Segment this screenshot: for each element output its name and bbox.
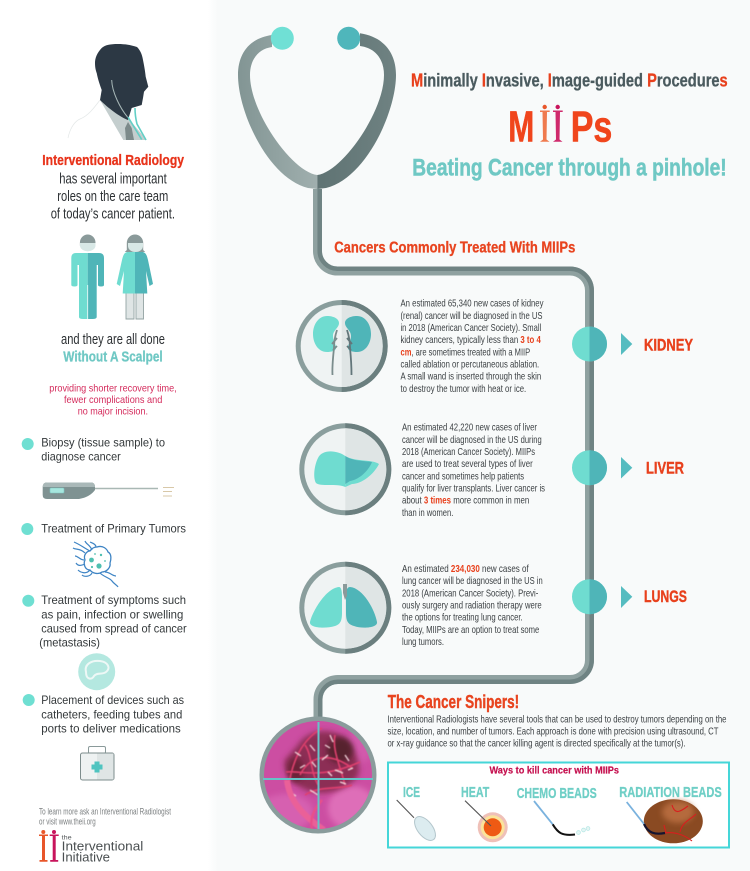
text: without a scalpel [61,331,165,366]
stethoscope tube [238,27,592,722]
label: kidney: KIDNEY [644,336,694,354]
panel: ways to kill cancer [388,762,729,848]
text: cancer snipers description [388,713,727,750]
bullet: primary tumors: Treatment of Primary Tumors [41,521,186,535]
tool: ice: ICE [403,784,420,801]
heading: full name of procedures: Minimally Invasive, Image-guided Procedures [411,71,728,91]
arrow: kidney [621,333,632,355]
text: interventional radiology intro: Interventional Radiology [42,152,185,169]
text: interventional radiology intro: of today’s cancer patient. [51,205,175,222]
bullet: symptoms: (metastasis) [39,636,100,650]
icon: stomach [78,653,115,690]
text: without a scalpel: Without A Scalpel [63,349,163,366]
logo: the interventional initiative [39,830,143,865]
text: liver description: An estimated 42,220 new cases of liver [402,422,537,434]
panel: kidney [296,298,694,395]
marker: lungs node [572,579,607,614]
text: liver description: cancer and sometimes help patients [402,470,524,482]
tool: ice [397,784,440,844]
logo: the interventional initiative: the [62,835,72,841]
text: learn more: To learn more ask an Interventional Radiologist [39,806,171,817]
text: benefits: providing shorter recovery time, [49,383,177,395]
icon: female clinician [117,234,153,319]
bullet: biopsy: Biopsy (tissue sample) to [41,436,165,450]
text: learn more [39,806,171,827]
text: lungs description: Today, MIIPs are an option to treat some [402,624,539,636]
image: tumor in crosshair scope [257,716,376,834]
bullet: symptoms [22,593,187,650]
title: MIIPs [508,103,612,152]
bullet: symptoms: caused from spread of cancer [41,622,187,636]
panel: liver [299,422,684,519]
bullet: devices: catheters, feeding tubes and [41,707,182,721]
text: kidney description [400,298,544,395]
bullet: devices: Placement of devices such as [41,693,184,707]
text: kidney description: An estimated 65,340 new cases of kidney [400,298,544,310]
text: lungs description: lung cancer will be diagnosed in the US in [402,575,543,587]
bullet: biopsy: diagnose cancer [41,450,121,464]
icon: lungs [299,562,391,654]
text: liver description: about 3 times more common in men [402,495,529,507]
panel: lungs [299,562,687,654]
label: liver: LIVER [646,458,684,478]
text: liver description [402,422,545,519]
text: liver description: than in women. [402,507,453,519]
marker: liver node [572,450,607,485]
bullet: symptoms: as pain, infection or swelling [41,607,183,621]
text: without a scalpel: and they are all done [61,331,165,348]
text: kidney description: (renal) cancer will be diagnosed in the US [400,310,542,322]
bullet: devices: ports to deliver medications [41,722,181,736]
bullet: symptoms: Treatment of symptoms such [41,593,186,607]
text: lungs description [402,563,543,648]
icon: liver [299,423,391,515]
text: interventional radiology intro [42,152,185,222]
panel heading: Ways to kill cancer with MIIPs [490,766,619,777]
marker: kidney node [572,326,607,362]
text: liver description: qualify for liver transplants. Liver cancer is [402,482,545,494]
bullet: devices [23,693,184,736]
arrow: liver [621,457,632,478]
text: liver description: cancer will be diagnosed in the US during [402,434,542,446]
title: MIIPs: M [508,103,534,152]
tool: heat [461,784,508,842]
text: interventional radiology intro: roles on the care team [57,188,168,205]
text: kidney description: kidney cancers, typically less than 3 to 4 [400,334,541,346]
tool: radiation beads [619,784,722,843]
text: benefits: fewer complications and [64,394,162,406]
icon: kidneys [296,300,388,392]
text: lungs description: 2018 (American Cancer Society). Previ- [402,587,539,599]
label: lungs: LUNGS [644,587,687,606]
text: liver description: 2018 (American Cancer Society). MIIPs [402,446,535,458]
text: kidney description: called ablation or percutaneous ablation. [400,358,539,370]
logo: the interventional initiative: Interventional [62,839,143,854]
text: kidney description: A small wand is inserted through the skin [400,371,541,383]
text: lungs description: ously surgery and radiation therapy were [402,600,542,612]
heading: the cancer snipers: The Cancer Snipers! [388,692,519,712]
text: lungs description: An estimated 234,030 new cases of [402,563,529,575]
logo: the interventional initiative: Initiative [62,850,110,865]
text: kidney description: to destroy the tumor with heat or ice. [400,383,526,395]
bullet: biopsy [22,436,165,464]
tool: chemo beads: CHEMO BEADS [517,785,597,802]
text: lungs description: lung tumors. [402,636,444,648]
arrow: lungs [621,586,632,608]
tool: chemo beads [517,785,597,835]
icon: doctor silhouette [68,44,148,140]
icon: tumor cell [73,541,118,587]
text: kidney description: cm, are sometimes treated with a MIIP [400,346,530,358]
text: interventional radiology intro: has several important [59,170,167,187]
text: lungs description: the options for treating lung cancer. [402,612,523,624]
tool: heat: HEAT [461,784,489,801]
heading: cancers commonly treated: Cancers Commonly Treated With MIIPs [334,240,575,257]
text: liver description: are used to treat several types of liver [402,458,533,470]
text: kidney description: in 2018 (American Cancer Society). Small [400,322,541,334]
icon: biopsy needle [43,482,174,499]
text: learn more: or visit www.theii.org [39,816,96,827]
text: benefits: no major incision. [78,406,148,418]
icon: medical kit [80,746,114,780]
title: MIIPs: Ps [571,103,612,152]
text: benefits [49,383,177,418]
icon: male clinician [71,234,104,319]
